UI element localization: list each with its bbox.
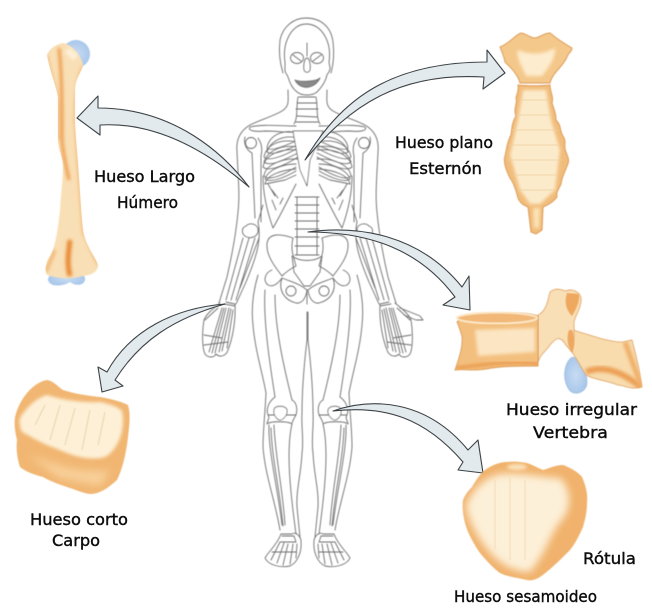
transverse process — [566, 330, 642, 388]
spinous process — [538, 289, 581, 362]
arrow to patella — [333, 404, 483, 473]
arrow to sternum — [305, 50, 505, 160]
label: flat bone — [395, 133, 493, 178]
cartilage — [565, 357, 587, 393]
teeth — [295, 78, 320, 87]
cartilage head — [62, 40, 90, 68]
skeleton figure — [203, 18, 423, 567]
left half of skeleton — [203, 90, 307, 567]
pubic symmetry — [306, 290, 308, 304]
manubrium highlight — [518, 48, 555, 76]
sternum in skeleton — [293, 131, 323, 186]
shaft — [46, 43, 98, 278]
label: sesamoid bone: Hueso sesamoideo — [454, 587, 597, 606]
arrow to vertebra — [308, 230, 470, 310]
right half of skeleton — [308, 90, 412, 567]
eye sockets — [290, 52, 304, 64]
arrow to carpal bone — [98, 304, 225, 392]
label: short bone: Hueso corto — [30, 510, 128, 529]
arrow to humerus — [77, 96, 249, 187]
hip joint — [265, 270, 307, 303]
side lower light — [28, 455, 110, 486]
body highlight — [508, 90, 562, 228]
streaks — [495, 478, 525, 560]
label: irregular bone: Hueso irregular — [506, 400, 637, 419]
thigh outer outline — [252, 275, 280, 530]
ribs — [267, 132, 298, 149]
bone body — [463, 462, 587, 580]
label: long bone: Hueso Largo — [94, 167, 195, 186]
inner leg outline — [297, 312, 307, 537]
skull — [284, 24, 330, 95]
neck vertebrae — [294, 97, 320, 124]
long bone: humerus — [46, 40, 98, 286]
label: flat bone: Hueso plano — [395, 133, 493, 152]
forearm bones — [226, 238, 259, 300]
bone body — [15, 380, 130, 494]
top face — [20, 395, 123, 458]
elbow — [242, 224, 258, 238]
inner arm outline — [236, 205, 263, 304]
irregular bone: vertebra — [455, 289, 642, 393]
patella — [274, 406, 287, 420]
shaft shading — [46, 48, 98, 276]
label: long bone: Húmero — [117, 193, 178, 212]
knee joint — [267, 397, 297, 423]
foot — [265, 533, 301, 567]
sacrum — [292, 256, 322, 286]
manubrium — [500, 33, 572, 83]
clavicle — [249, 125, 296, 132]
pale face — [466, 474, 569, 572]
costal margin — [263, 176, 296, 228]
label: patella: Rótula — [583, 549, 636, 568]
top rim highlight — [507, 464, 527, 470]
sternum body — [504, 85, 569, 234]
vertebral body — [455, 313, 538, 370]
label: short bone — [30, 510, 128, 550]
label: short bone: Carpo — [52, 531, 100, 550]
tibia and fibula — [267, 422, 296, 534]
femur — [265, 290, 292, 400]
sesamoid bone: patella — [463, 462, 587, 580]
label: irregular bone: Vertebra — [533, 423, 608, 442]
label: flat bone: Esternón — [409, 159, 482, 178]
body outline: shoulder and arm — [219, 90, 288, 303]
nose — [304, 43, 310, 72]
humerus — [245, 137, 262, 222]
short bone: carpal — [15, 380, 130, 494]
flat bone: sternum — [500, 33, 572, 234]
label: irregular bone — [506, 400, 637, 442]
right thumb — [400, 308, 423, 320]
iliac wing — [267, 235, 296, 276]
cartilage condyles — [48, 272, 85, 286]
spine — [295, 197, 319, 255]
body upper face — [457, 312, 537, 324]
head outline — [279, 18, 334, 73]
hand — [203, 302, 235, 357]
label: long bone — [94, 167, 195, 212]
